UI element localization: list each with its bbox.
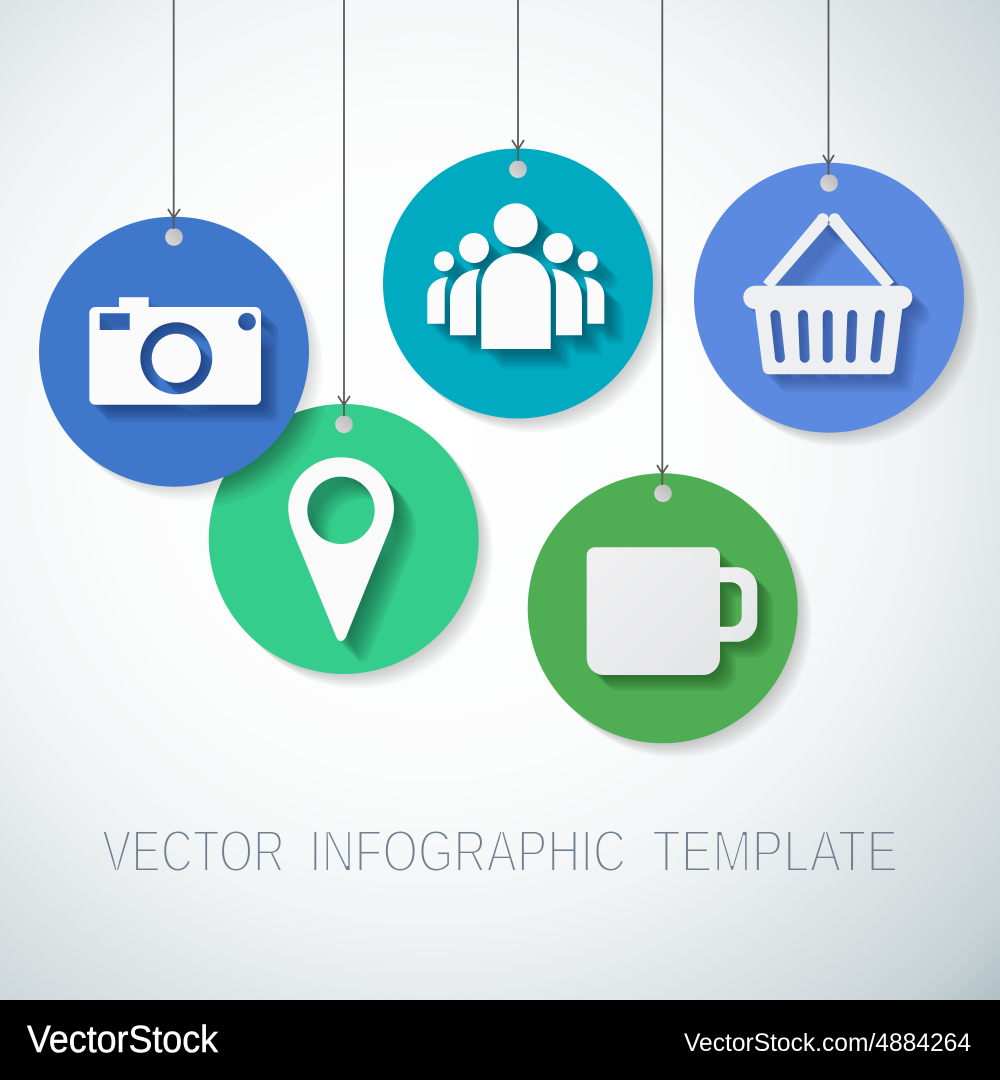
string and knot [338,0,350,416]
watermark logo text: VectorStock [27,1019,219,1061]
string and knot [512,0,524,161]
string and knot [657,0,668,485]
string and knot [168,0,180,229]
panel: map pin tag [209,0,493,688]
hanging hole [509,160,527,178]
title: VECTOR [102,818,285,884]
icon: map pin long shadow [307,476,416,663]
icon: cup [587,547,757,675]
watermark image id: VectorStock.com/4884264 [684,1029,971,1057]
icon: basket [743,213,912,374]
icon: people group long shadow [429,205,624,369]
icon: camera long shadow [91,299,279,423]
panel: people tag [383,0,667,432]
hanging hole [335,416,353,433]
icon: map pin [288,457,394,641]
title: TEMPLATE [652,818,898,884]
title: INFOGRAPHIC [309,818,626,884]
watermark bar [0,1000,1000,1080]
panel: cup tag [528,0,812,757]
icon: basket long shadow [745,215,930,392]
hanging hole [820,174,838,192]
hanging hole [654,484,672,502]
string and knot [823,0,834,175]
panel: camera tag [39,0,330,508]
title [102,818,898,884]
icon: camera [89,297,261,405]
icon: people group [427,203,604,349]
panel: basket tag [694,0,978,447]
hanging hole [165,228,183,246]
icon: cup long shadow [589,549,773,691]
